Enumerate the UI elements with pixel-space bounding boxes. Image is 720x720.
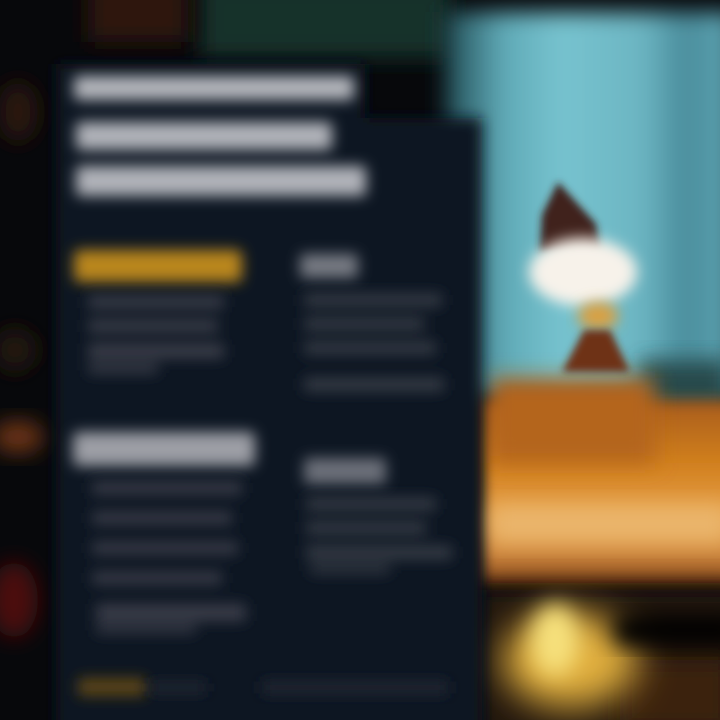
background: dark streak lower right bbox=[615, 615, 720, 645]
section label: grey highlight pill bbox=[73, 432, 255, 466]
text block: upper right column bbox=[304, 294, 444, 391]
background: bright floor glow bbox=[502, 612, 638, 708]
footer: grey caption bbox=[150, 682, 206, 693]
background: left orange spot bbox=[0, 421, 44, 453]
figure: brown hat bbox=[540, 182, 600, 252]
text block: under grey pill bbox=[92, 482, 246, 633]
heading: blurred title lines bbox=[74, 76, 366, 196]
background: dark lower table bbox=[480, 590, 720, 720]
background: left mid brown spot bbox=[0, 328, 37, 372]
footer: right caption bbox=[262, 681, 448, 694]
background: lower right warm floor bbox=[620, 660, 720, 720]
background: table raised block bbox=[490, 378, 655, 463]
background: wooden table bbox=[480, 400, 720, 585]
figure: yellow waist bbox=[578, 302, 618, 330]
figure: white body bbox=[529, 238, 637, 306]
section label: upper right heading bbox=[300, 254, 358, 278]
background: table highlight bbox=[490, 505, 720, 543]
background: dark green wall bbox=[200, 0, 450, 58]
figure: brown base bbox=[562, 330, 630, 372]
background: brown top corner bbox=[88, 0, 188, 42]
background: teal window bbox=[445, 12, 720, 397]
section label: amber highlight pill bbox=[74, 250, 242, 282]
text block: lower right column bbox=[306, 498, 452, 573]
background: left edge warm spots bbox=[0, 82, 38, 142]
background: floor glow core bbox=[531, 604, 579, 676]
background: left red spot bbox=[0, 562, 38, 638]
section label: lower right heading bbox=[304, 458, 386, 484]
text block: under amber pill bbox=[88, 296, 224, 373]
footer: amber logo mark bbox=[78, 678, 146, 696]
panel: dark navy content card bbox=[56, 64, 482, 720]
background: window lower shadow bbox=[640, 360, 720, 410]
